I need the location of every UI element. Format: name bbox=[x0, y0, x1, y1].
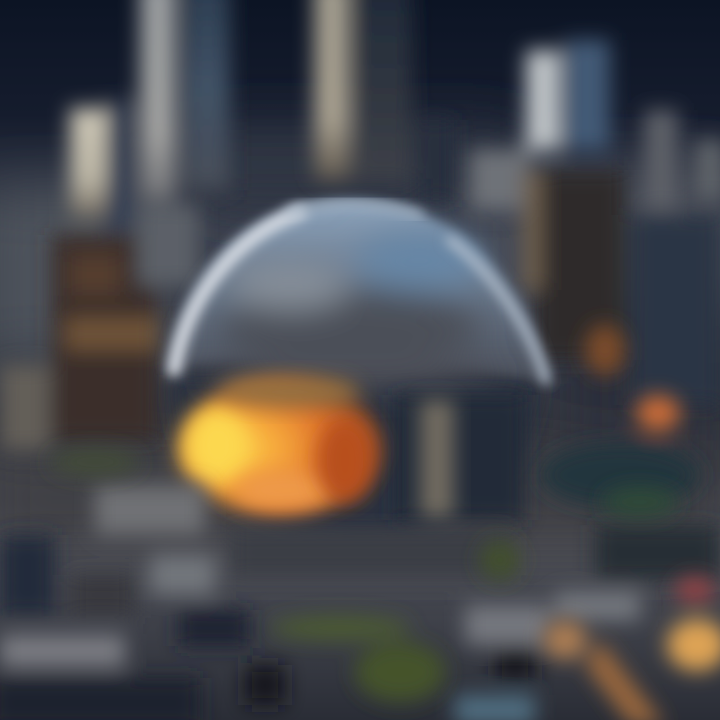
foreground city blocks bbox=[0, 485, 720, 720]
centre towers bbox=[314, 0, 454, 200]
dome inner pillar bbox=[420, 400, 454, 518]
dome inner city reflections bbox=[200, 232, 500, 389]
fire inside dome bbox=[178, 376, 382, 514]
dome upper glass bbox=[165, 200, 552, 385]
dome bright left rim bbox=[174, 212, 300, 370]
foreground orange and red accents bbox=[543, 576, 720, 720]
left towers bbox=[0, 0, 230, 450]
fire yellow core bbox=[188, 409, 248, 481]
dome top rim bbox=[290, 203, 420, 215]
glass dome bbox=[165, 200, 552, 535]
right towers bbox=[470, 40, 720, 405]
fire top glow bbox=[220, 376, 360, 408]
fire light orange band bbox=[235, 470, 335, 510]
dome right lower dark bbox=[395, 395, 525, 520]
dome lower body bbox=[172, 375, 540, 535]
fire red-orange hot spot bbox=[317, 418, 373, 502]
distant skyline haze bbox=[0, 130, 720, 550]
foreground green foliage bbox=[50, 449, 678, 702]
dome bright right rim bbox=[450, 240, 546, 380]
right side orange glows bbox=[540, 324, 700, 507]
